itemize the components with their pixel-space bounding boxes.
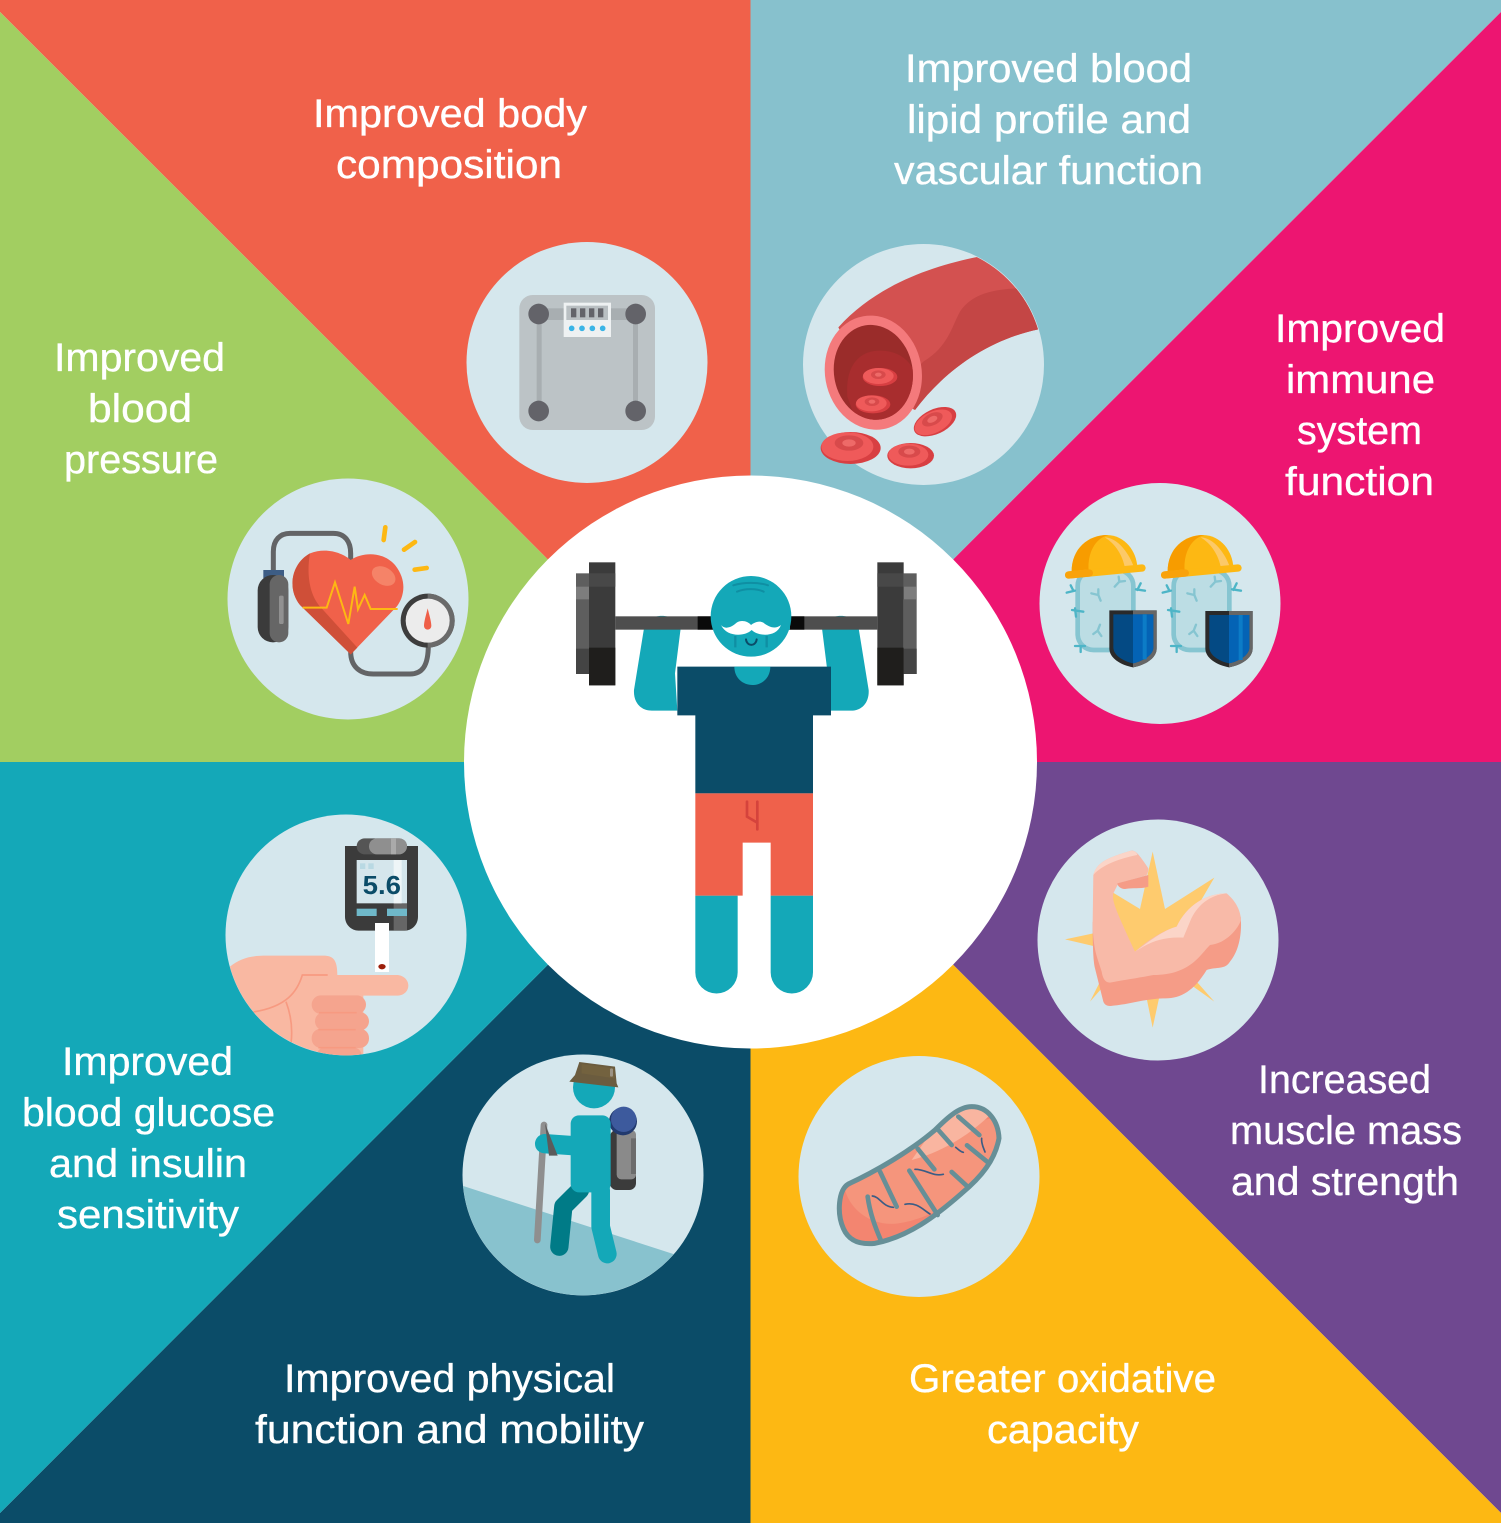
icon: heart and blood pressure cuff [228, 478, 468, 720]
heading: increased muscle mass: Increased [1258, 1058, 1431, 1102]
heading: improved body composition: Improved body [313, 92, 587, 136]
left arm [634, 616, 681, 711]
wedge: red [0, 0, 750, 762]
icon: hiker [460, 1054, 713, 1303]
heading: improved physical function: function and mobility [255, 1408, 644, 1452]
heading: improved immune system function: immune [1286, 358, 1435, 402]
right arm [822, 616, 869, 711]
icon: blood vessel with red cells [803, 244, 1062, 485]
meter reading: 5.6 [363, 870, 401, 900]
panel: improved physical function and mobility [0, 964, 750, 1523]
heading: improved body composition: composition [336, 143, 562, 187]
heading: improved physical function [255, 1357, 644, 1452]
shirt [677, 667, 831, 793]
heading: improved blood lipid profile: Improved blood [905, 47, 1192, 91]
heading: improved blood pressure [54, 336, 225, 482]
heading: improved immune system function: function [1285, 460, 1434, 504]
panel: increased muscle mass and strength [750, 762, 1501, 1513]
shorts [695, 793, 813, 896]
heading: improved blood lipid profile: vascular function [894, 149, 1203, 193]
icon: flexed arm [1038, 820, 1278, 1060]
panel: improved immune system function [750, 12, 1501, 762]
heading: improved body composition [313, 92, 587, 187]
heading: improved blood pressure: blood [88, 387, 192, 431]
heading: improved blood pressure: Improved [54, 336, 225, 380]
heading: improved blood pressure: pressure [64, 438, 218, 482]
legs [695, 896, 813, 993]
neck [734, 667, 770, 685]
heading: improved blood glucose: sensitivity [57, 1193, 239, 1237]
heading: greater oxidative capacity: Greater oxidative [909, 1357, 1216, 1401]
heading: greater oxidative capacity [909, 1357, 1216, 1452]
heading: improved blood glucose: blood glucose [22, 1091, 275, 1135]
wedge: purple [750, 762, 1501, 1513]
icon: bathroom scale [466, 242, 708, 483]
panel: improved body composition [0, 0, 750, 762]
heading: improved blood glucose: and insulin [49, 1142, 247, 1186]
wedge: light blue [750, 0, 1501, 762]
wedge: green [0, 12, 750, 762]
heading: increased muscle mass: and strength [1231, 1160, 1459, 1204]
heading: improved blood lipid profile [894, 47, 1203, 193]
wedge: pink [750, 12, 1501, 762]
panel: improved blood lipid profile and vascular function [750, 0, 1501, 560]
heading: improved immune system function: Improved [1275, 307, 1445, 351]
panel: improved blood glucose and insulin sensitivity [0, 762, 548, 1513]
heading: improved immune system function: system [1297, 409, 1422, 453]
panel: improved blood pressure [0, 12, 750, 762]
heading: greater oxidative capacity: capacity [987, 1408, 1139, 1452]
heading: improved blood glucose: Improved [62, 1040, 233, 1084]
panel: greater oxidative capacity [750, 964, 1501, 1523]
wedge: navy [0, 762, 750, 1523]
wedge: yellow [750, 762, 1501, 1523]
heading: increased muscle mass [1230, 1058, 1462, 1204]
icon: mitochondrion [798, 1056, 1040, 1297]
wedge: teal [0, 762, 750, 1513]
heading: improved physical function: Improved physical [284, 1357, 615, 1401]
icon: glucose meter and finger [220, 814, 466, 1064]
head with moustache [711, 576, 791, 657]
heading: improved blood lipid profile: lipid profile and [907, 98, 1191, 142]
icon: immune cells with helmets and shields [1040, 483, 1280, 724]
heading: increased muscle mass: muscle mass [1230, 1109, 1462, 1153]
central white disc with weightlifter [464, 476, 1037, 1048]
barbell [576, 562, 917, 685]
heading: improved immune system function [1275, 307, 1445, 504]
heading: improved blood glucose [22, 1040, 275, 1237]
